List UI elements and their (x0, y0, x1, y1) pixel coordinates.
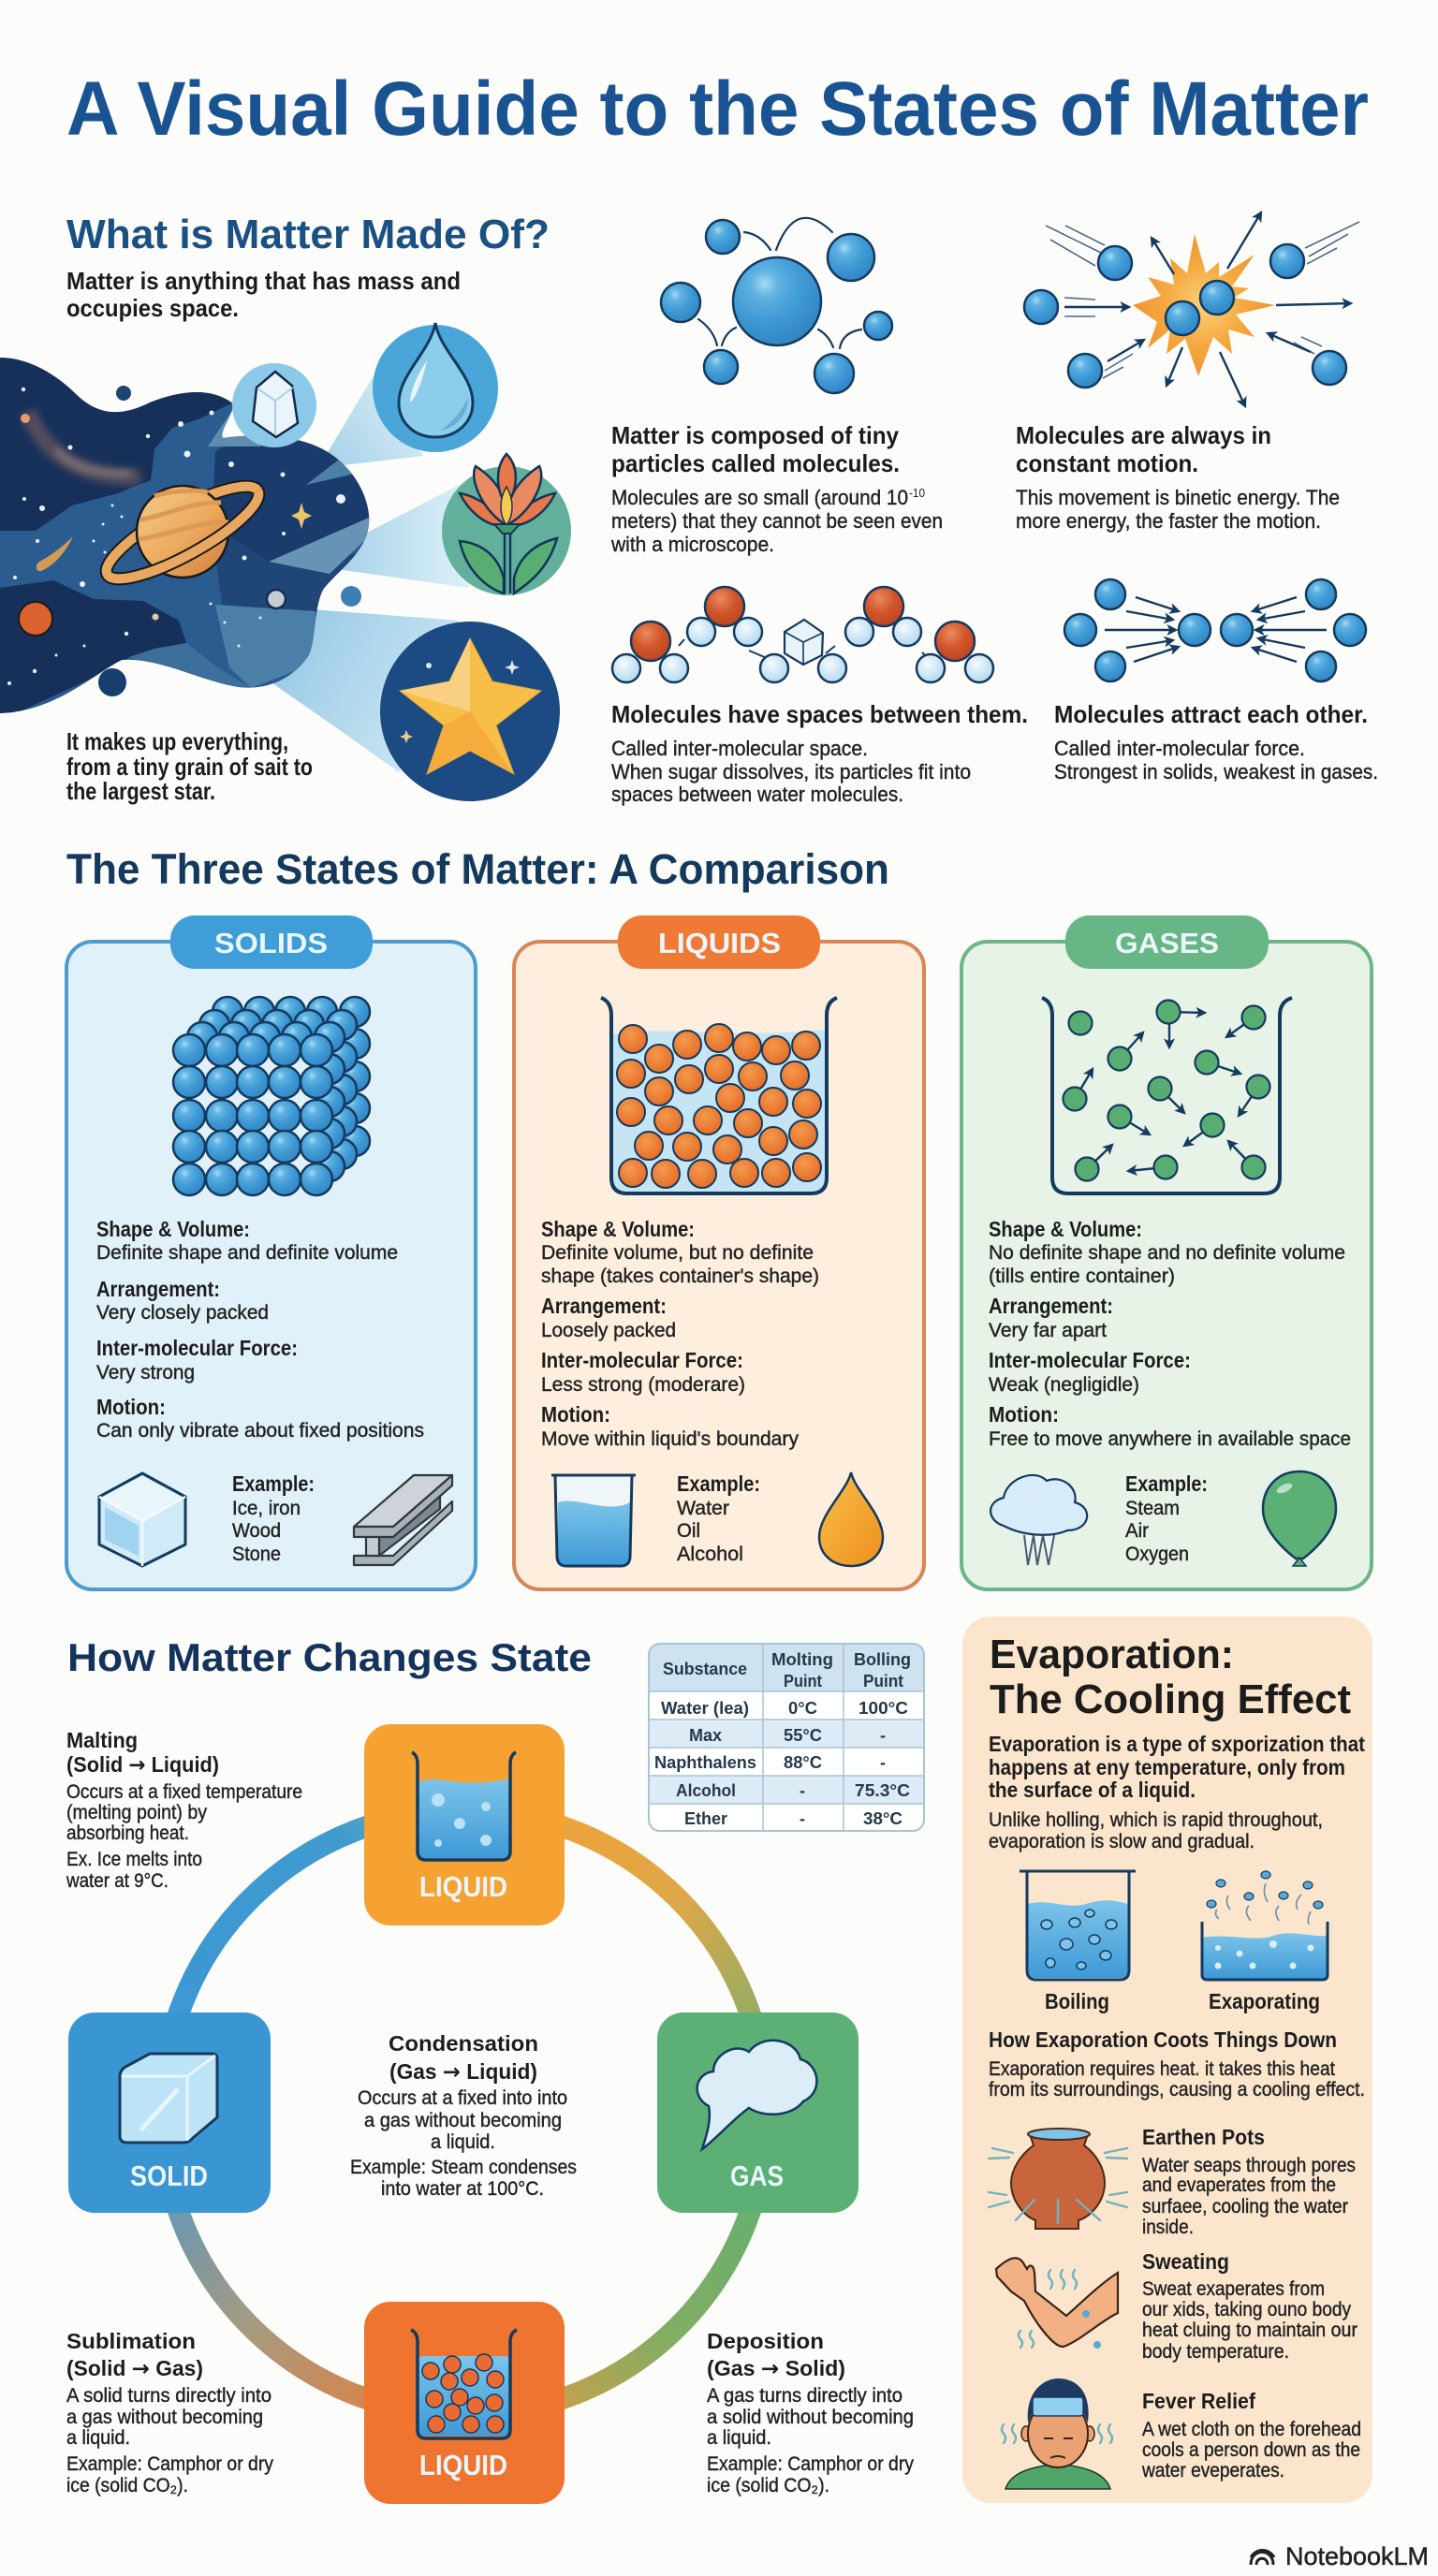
diagram: molecules in motion (1024, 212, 1359, 406)
text block: sublimation: a liquid. (66, 2427, 130, 2449)
diagram: state change ring (68, 1724, 858, 2504)
icon: steel I-beam (354, 1475, 452, 1565)
text block: condensation: into water at 100°C. (381, 2178, 544, 2200)
text block: condensation: a liquid. (431, 2131, 495, 2153)
text: gas examples: Air (1125, 1520, 1149, 1542)
text block: constant motion: constant motion. (1016, 449, 1198, 477)
badge: solids: SOLIDS (214, 927, 328, 959)
text block: melting: (Solid → Liquid) (66, 1752, 219, 1778)
icon: ice in circle (232, 363, 316, 447)
diagram: molecules (661, 218, 892, 393)
text block: melting: Ex. Ice melts into (66, 1849, 202, 1870)
node: solid (68, 2012, 271, 2213)
text: how evaporation cools: from its surroundings, causing a cooling effect. (989, 2079, 1365, 2100)
icon: oil drop (819, 1472, 883, 1566)
table: melting and boiling points: Molting (771, 1650, 833, 1669)
properties: liquids: Loosely packed (541, 1320, 676, 1341)
text block: constant motion (1016, 421, 1340, 533)
panel: evaporation (962, 1617, 1372, 2503)
node: top liquid: LIQUID (419, 1870, 507, 1903)
properties: gases: Motion: (989, 1402, 1059, 1427)
properties: gases: (tills entire container) (989, 1266, 1175, 1287)
table: melting and boiling points: Naphthalens (654, 1753, 756, 1772)
text: sweating: our xids, taking ouno body (1142, 2299, 1351, 2320)
text: solid examples: Example: (232, 1471, 315, 1496)
text block: deposition (707, 2329, 914, 2496)
text: evaporation definition: happens at eny temperature, only from (989, 1755, 1345, 1779)
badge: liquids: LIQUIDS (658, 927, 781, 959)
text: sweating: Sweat exaperates from (1142, 2278, 1325, 2300)
properties: liquids: Definite volume, but no definite (541, 1242, 814, 1264)
properties: gases: Free to move anywhere in available space (989, 1428, 1351, 1450)
text block: constant motion: This movement is binetic energy. The (1016, 486, 1340, 509)
text block: attract each other (1054, 700, 1378, 783)
table: melting and boiling points: - (800, 1809, 805, 1828)
icon: earthen pot (989, 2129, 1127, 2229)
text block: condensation: Condensation (389, 2031, 538, 2056)
table: melting and boiling points: Alcohol (676, 1781, 736, 1800)
intro text line two: occupies space. (66, 294, 239, 322)
properties: solids (96, 1217, 424, 1442)
properties: liquids: Shape & Volume: (541, 1217, 695, 1241)
text: earthen pots: surfaee, cooling the water (1142, 2196, 1348, 2217)
caption: makes up everything: It makes up everything, (66, 727, 288, 755)
text: fever relief: A wet cloth on the forehead (1142, 2419, 1361, 2440)
icon: boiling beaker (1020, 1871, 1136, 1980)
text block: attract each other: Strongest in solids, weakest in gases. (1054, 760, 1378, 783)
heading: evaporation: Evaporation: (990, 1632, 1234, 1677)
properties: solids: Inter-molecular Force: (96, 1336, 298, 1360)
table: melting and boiling points: Bolling (854, 1650, 911, 1669)
properties: solids: Motion: (96, 1395, 166, 1419)
icon: ringed planet (96, 471, 269, 594)
text block: tiny particles: particles called molecules. (611, 449, 900, 477)
table: melting and boiling points: 0°C (788, 1699, 817, 1718)
text: solid examples: Wood (232, 1520, 281, 1542)
text: evaporation definition (989, 1732, 1365, 1852)
table: melting and boiling points: 38°C (863, 1809, 902, 1828)
text: liquid examples: Water (677, 1498, 729, 1519)
text: liquid examples: Oil (677, 1520, 700, 1542)
properties: gases: Very far apart (989, 1320, 1107, 1341)
logo: NotebookLM: NotebookLM (1285, 2542, 1429, 2570)
text block: condensation: a gas without becoming (364, 2110, 562, 2131)
text: how evaporation cools (989, 2027, 1365, 2100)
text block: spaces between: Molecules have spaces between them. (611, 700, 1028, 728)
properties: solids: Definite shape and definite volume (96, 1242, 398, 1264)
illustration: space nebula with planet (0, 356, 374, 721)
icon: fever relief person (1002, 2378, 1112, 2489)
properties: gases: Arrangement: (989, 1294, 1113, 1318)
badge: gases: GASES (1115, 927, 1219, 959)
text block: melting: absorbing heat. (66, 1822, 189, 1844)
text: how evaporation cools: How Exaporation Coots Things Down (989, 2027, 1337, 2052)
text: gas examples: Example: (1125, 1471, 1208, 1496)
text block: sublimation: Sublimation (66, 2329, 196, 2353)
properties: gases: Shape & Volume: (989, 1217, 1142, 1241)
properties: gases: Inter-molecular Force: (989, 1348, 1191, 1372)
text block: deposition: a liquid. (707, 2427, 771, 2449)
table: melting and boiling points: Puint (863, 1672, 903, 1690)
diagram: water and sugar molecules with spaces (612, 587, 993, 682)
text block: spaces between: When sugar dissolves, its particles fit into (611, 760, 971, 783)
icon: grey moon (267, 590, 286, 608)
caption line three: the largest star. (66, 777, 215, 805)
text block: melting: (melting point) by (66, 1802, 207, 1823)
galaxy dust (28, 412, 140, 477)
table: melting and boiling points: 55°C (784, 1726, 822, 1745)
properties: liquids: Less strong (moderare) (541, 1374, 745, 1396)
properties: gases (989, 1217, 1351, 1450)
node: bottom liquid (364, 2302, 565, 2504)
caption line two: from a tiny grain of sait to (66, 753, 313, 781)
text block: melting (66, 1728, 302, 1892)
diagram: molecules attracting (1064, 579, 1366, 681)
text block: condensation: Example: Steam condenses (350, 2157, 577, 2178)
icon: red planet (19, 602, 52, 636)
text: evaporation definition: Evaporation is a type of sxporization that (989, 1732, 1365, 1756)
properties: liquids: shape (takes container's shape) (541, 1266, 819, 1287)
text: sweating (1142, 2249, 1357, 2363)
badge: liquids (618, 915, 820, 969)
intro text: Matter is anything that has mass and (66, 267, 461, 295)
properties: liquids: Move within liquid's boundary (541, 1428, 800, 1450)
table: melting and boiling points: Puint (784, 1672, 822, 1690)
text block: deposition: a solid without becoming (707, 2407, 914, 2428)
node: gas: GAS (730, 2159, 784, 2192)
text block: spaces between: spaces between water molecules. (611, 783, 903, 806)
properties: liquids (541, 1217, 819, 1450)
properties: liquids: Motion: (541, 1402, 610, 1427)
text block: sublimation: (Solid → Gas) (66, 2356, 203, 2381)
heading: three states comparison: The Three States of Matter: A Comparison (66, 845, 889, 893)
text block: deposition: A gas turns directly into (707, 2385, 902, 2407)
text: sweating: heat cluing to maintain our (1142, 2320, 1357, 2341)
panel: liquids (514, 915, 924, 1589)
text block: spaces between: Called inter-molecular space. (611, 737, 868, 760)
decorative planets outside nebula (98, 386, 361, 696)
text block: constant motion: Molecules are always in (1016, 421, 1271, 449)
text: solid examples: Ice, iron (232, 1498, 301, 1519)
properties: solids: Shape & Volume: (96, 1217, 250, 1241)
heading: how matter changes state: How Matter Changes State (67, 1635, 592, 1679)
text block: attract each other: Molecules attract each other. (1054, 700, 1368, 728)
text block: deposition: Deposition (707, 2329, 824, 2353)
text block: deposition: Example: Camphor or dry (707, 2453, 914, 2475)
properties: gases: Weak (negligidle) (989, 1374, 1139, 1396)
text: solid examples (232, 1471, 315, 1565)
table: melting and boiling points: - (880, 1726, 886, 1745)
icon: sweating arm (996, 2258, 1118, 2349)
text: solid examples: Stone (232, 1544, 281, 1565)
text block: sublimation: A solid turns directly into (66, 2385, 271, 2407)
text: earthen pots: Earthen Pots (1142, 2125, 1265, 2149)
text: fever relief: water eveperates. (1141, 2460, 1284, 2481)
title: A Visual Guide to the States of Matter (66, 66, 1369, 152)
diagram: gas particles in container (1042, 998, 1292, 1193)
text: earthen pots: inside. (1142, 2217, 1194, 2238)
properties: solids: Arrangement: (96, 1277, 220, 1301)
text block: tiny particles: Molecules are so small (around 10 (611, 486, 908, 509)
table: melting and boiling points: 75.3°C (855, 1781, 910, 1800)
text block: sublimation: a gas without becoming (66, 2407, 263, 2428)
properties: solids: Very strong (96, 1362, 195, 1383)
text: sweating: body temperature. (1142, 2341, 1289, 2363)
panel: gases (961, 915, 1372, 1589)
properties: solids: Can only vibrate about fixed positions (96, 1420, 424, 1442)
icon: star in circle (380, 622, 560, 801)
icon: evaporating water (1202, 1871, 1328, 1980)
heading: what is matter made of: What is Matter Made Of? (66, 212, 550, 257)
table: melting and boiling points: 88°C (784, 1753, 822, 1772)
table: melting and boiling points: 100°C (858, 1699, 908, 1718)
text block: tiny particles: with a microscope. (610, 533, 774, 556)
icon: ice cube (99, 1473, 185, 1566)
text block: sublimation (66, 2329, 273, 2496)
node: top liquid (364, 1724, 565, 1925)
table: melting and boiling points: - (800, 1781, 805, 1800)
panel: solids (66, 915, 476, 1589)
table: melting and boiling points (649, 1644, 924, 1831)
text: fever relief (1141, 2389, 1361, 2481)
text block: melting: Occurs at a fixed temperature (66, 1781, 302, 1803)
badge: solids (170, 915, 373, 969)
icon: green balloon (1263, 1471, 1336, 1566)
text block: constant motion: more energy, the faster the motion. (1016, 509, 1321, 533)
text: how evaporation cools: Exaporation requires heat. it takes this heat (989, 2058, 1335, 2080)
text block: tiny particles: Matter is composed of tiny (611, 421, 899, 449)
text: earthen pots (1142, 2125, 1356, 2238)
properties: solids: Very closely packed (96, 1302, 269, 1324)
heading: evaporation (990, 1632, 1351, 1722)
text: earthen pots: Water seaps through pores (1142, 2155, 1356, 2176)
text block: attract each other: Called inter-molecular force. (1054, 737, 1305, 760)
table: melting and boiling points: Substance (663, 1660, 747, 1678)
text block: deposition: ice (solid CO₂). (707, 2475, 829, 2496)
table: melting and boiling points: - (880, 1753, 886, 1772)
text: earthen pots: and evaperates from the (1142, 2174, 1336, 2196)
text: fever relief: Fever Relief (1142, 2389, 1255, 2413)
table: melting and boiling points: Water (lea) (661, 1699, 749, 1718)
labels: boiling and evaporating: Exaporating (1209, 1989, 1320, 2013)
text block: condensation: Occurs at a fixed into into (358, 2087, 567, 2109)
text: gas examples (1125, 1471, 1208, 1565)
labels: boiling and evaporating: Boiling (1045, 1989, 1109, 2013)
illustration: light beams from space to objects (272, 377, 469, 772)
text: liquid examples (677, 1471, 760, 1565)
text block: spaces between (611, 700, 1028, 806)
text: gas examples: Oxygen (1125, 1544, 1189, 1565)
text: liquid examples: Alcohol (677, 1544, 743, 1565)
icon: flower in circle (442, 454, 571, 595)
diagram: liquid particles in container (601, 998, 837, 1193)
text block: tiny particles: meters) that they cannot be seen even (611, 509, 943, 533)
text: evaporation definition: evaporation is slow and gradual. (989, 1831, 1255, 1852)
text block: sublimation: ice (solid CO₂). (66, 2475, 188, 2496)
icon: water drop in circle (373, 323, 498, 452)
text block: melting: Malting (66, 1728, 138, 1752)
text: evaporation definition: Unlike holling, which is rapid throughout, (989, 1809, 1323, 1831)
badge: gases (1065, 915, 1269, 969)
text: sweating: Sweating (1142, 2249, 1229, 2274)
diagram: solid particle lattice (173, 997, 370, 1195)
text block: sublimation: Example: Camphor or dry (66, 2453, 273, 2475)
icon: beaker of water (551, 1475, 636, 1566)
properties: liquids: Arrangement: (541, 1294, 667, 1318)
text: gas examples: Steam (1125, 1498, 1180, 1519)
text: liquid examples: Example: (677, 1471, 760, 1496)
text: fever relief: cools a person down as the (1142, 2439, 1360, 2461)
text block: tiny particles (610, 421, 943, 556)
text block: condensation: (Gas → Liquid) (389, 2059, 537, 2085)
heading: evaporation: The Cooling Effect (990, 1676, 1351, 1722)
properties: liquids: Inter-molecular Force: (541, 1348, 743, 1372)
text: evaporation definition: the surface of a liquid. (989, 1778, 1196, 1802)
labels: boiling and evaporating (1045, 1989, 1320, 2013)
text block: deposition: (Gas → Solid) (707, 2356, 845, 2381)
icon: star sparkle (291, 503, 312, 529)
icon: comet (37, 536, 73, 571)
text block: condensation (350, 2031, 577, 2200)
icon: steam cloud (990, 1475, 1087, 1565)
node: bottom liquid: LIQUID (419, 2449, 507, 2481)
text block: melting: water at 9°C. (66, 1870, 169, 1892)
table: melting and boiling points: Max (689, 1726, 722, 1745)
node: gas (657, 2012, 858, 2213)
properties: gases: No definite shape and no definite volume (989, 1242, 1345, 1264)
text block: tiny particles: -10 (909, 486, 925, 500)
table: melting and boiling points: Ether (684, 1809, 727, 1828)
node: solid: SOLID (130, 2159, 208, 2192)
